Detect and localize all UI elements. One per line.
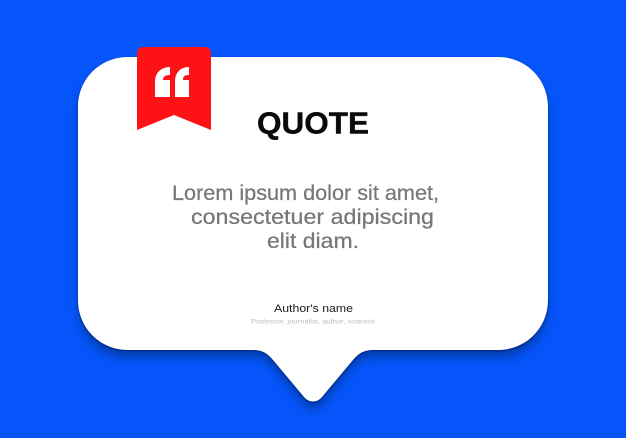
author description: Professor, journalist, author, scientist bbox=[251, 318, 375, 326]
icon: quotation marks bbox=[155, 67, 189, 97]
bookmark ribbon bbox=[137, 47, 211, 130]
quote body text: elit diam. bbox=[267, 229, 359, 253]
quote body text bbox=[172, 181, 439, 253]
author name: Author's name bbox=[274, 303, 353, 315]
quote body text: Lorem ipsum dolor sit amet, bbox=[172, 181, 439, 205]
quote body text: consectetuer adipiscing bbox=[191, 205, 434, 229]
title: QUOTE bbox=[257, 106, 369, 140]
speech bubble panel bbox=[78, 57, 548, 402]
speech bubble shadow bbox=[78, 58, 548, 410]
